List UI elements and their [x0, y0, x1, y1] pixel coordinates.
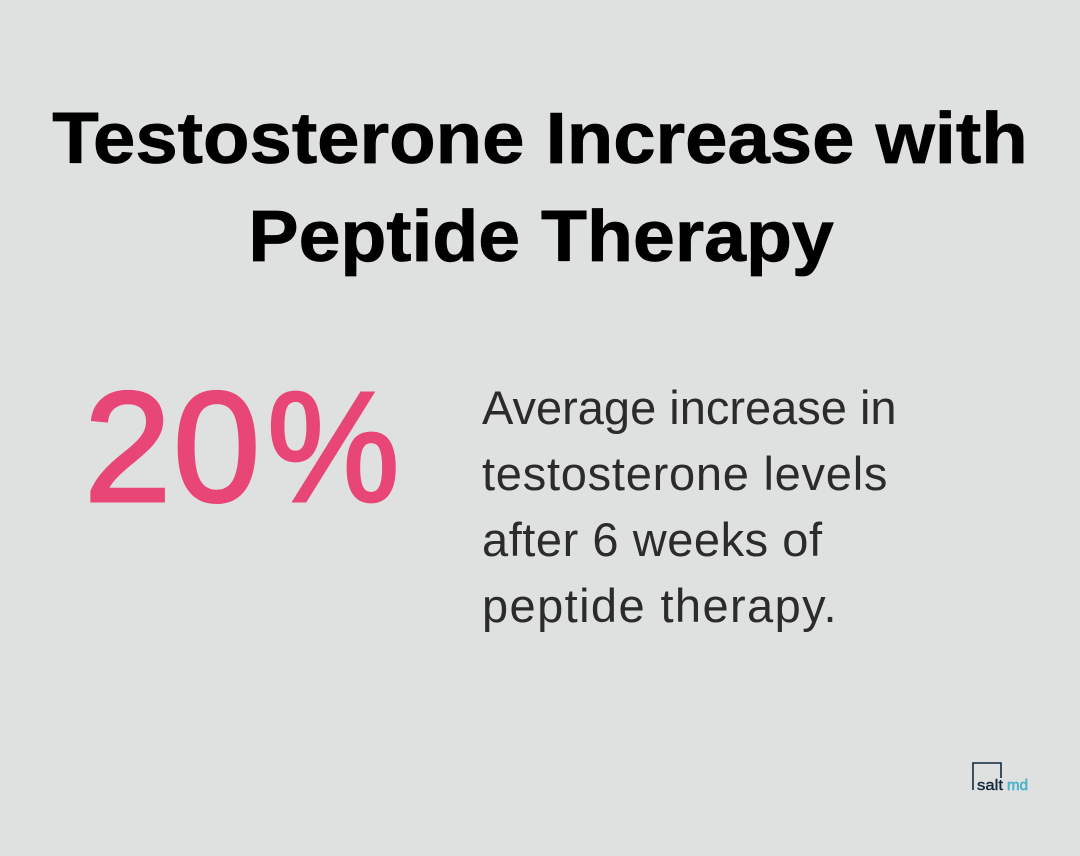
big stat: 20%: 2 [84, 360, 171, 535]
big stat: 20% [84, 360, 400, 535]
icon: saltmd logo [972, 762, 1028, 794]
title: Testosterone Increase with [52, 99, 1027, 179]
stat description: Average increase in [482, 381, 897, 434]
title [52, 99, 1027, 277]
stat description: peptide therapy. [482, 579, 838, 632]
stat description [482, 381, 897, 632]
icon: saltmd logo: salt [977, 777, 1004, 794]
stat description: testosterone levels [482, 447, 888, 500]
title: Peptide Therapy [248, 197, 834, 277]
big stat: 20%: % [267, 360, 400, 535]
stat description: after 6 weeks of [482, 513, 823, 566]
icon: saltmd logo: md [1007, 777, 1028, 794]
big stat: 20%: 0 [173, 360, 260, 535]
